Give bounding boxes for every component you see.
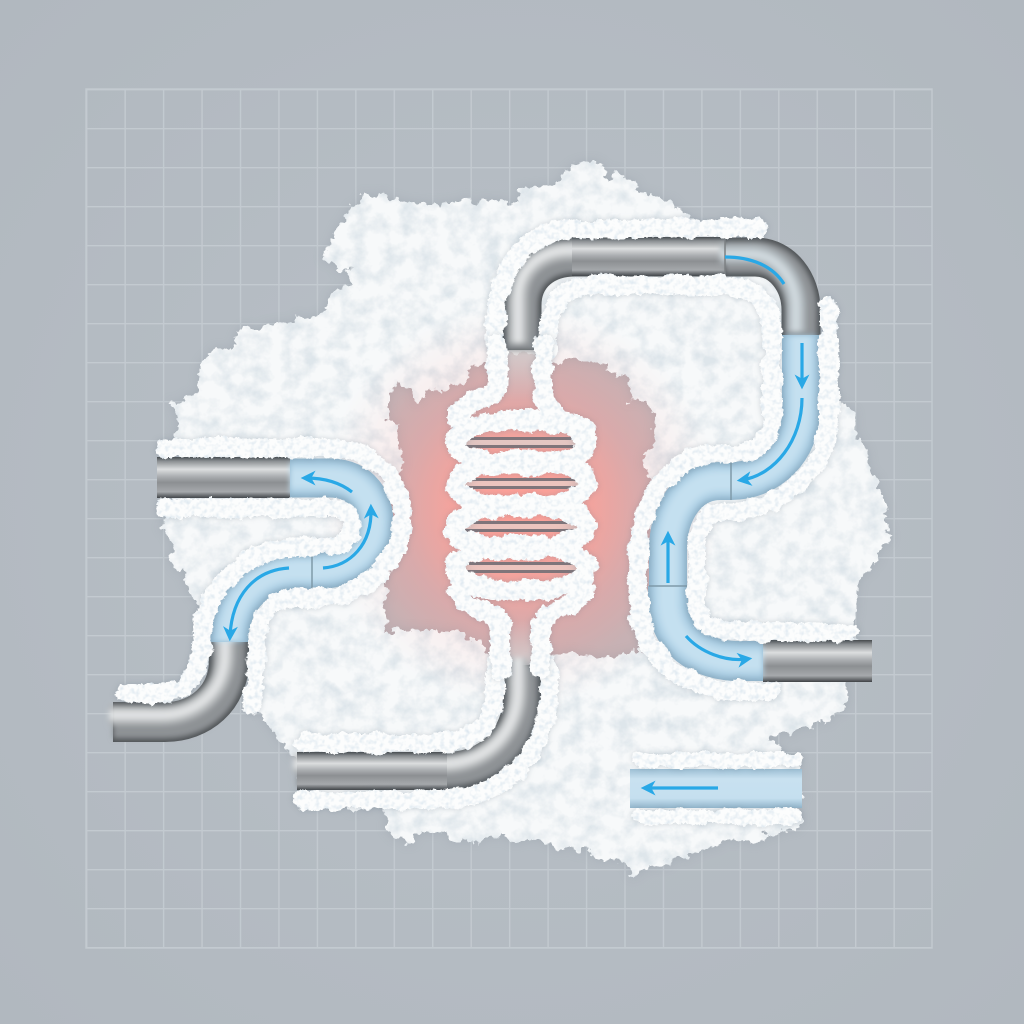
- frost wrap: bottom centre pipe: [302, 665, 549, 800]
- frost coil around heating element: [455, 345, 587, 670]
- arrow: detached segment: [646, 786, 718, 790]
- pipe: lower right steel straight: [763, 640, 872, 682]
- heat glow over insulation: [320, 305, 720, 705]
- arrow: right down: [800, 343, 804, 384]
- arrow: left bend down: [230, 568, 289, 636]
- flow arrows: [230, 257, 802, 788]
- pipe: right insulated blue section: [649, 335, 801, 661]
- arrow: left bend up: [323, 509, 371, 568]
- arrow: top right bend stroke: [725, 257, 784, 284]
- heat zone behind the coil: [370, 345, 670, 675]
- arrow: left outlet: [306, 478, 352, 492]
- pipe: lower left steel elbow: [109, 635, 229, 722]
- pipe: left insulated blue section: [229, 478, 374, 642]
- arrow: lower right curve: [686, 636, 747, 660]
- pipe: detached blue segment: [630, 769, 802, 808]
- frost wrap: left pipes: [126, 448, 402, 705]
- arrow: right curve: [742, 398, 802, 480]
- arrow: right up: [666, 536, 670, 583]
- pipe: upper left steel straight: [157, 457, 291, 498]
- frost wrap: detached blue segment: [638, 760, 795, 817]
- heating element rods: [462, 437, 581, 573]
- central pipe stubs: [506, 350, 538, 665]
- pipe: top steel run: [518, 237, 725, 350]
- frost wrap: top and right pipes: [495, 228, 850, 691]
- pipe: top right steel elbow: [720, 237, 801, 335]
- pipe: bottom centre steel elbow: [293, 658, 522, 790]
- insulation cloud mass: [165, 165, 888, 870]
